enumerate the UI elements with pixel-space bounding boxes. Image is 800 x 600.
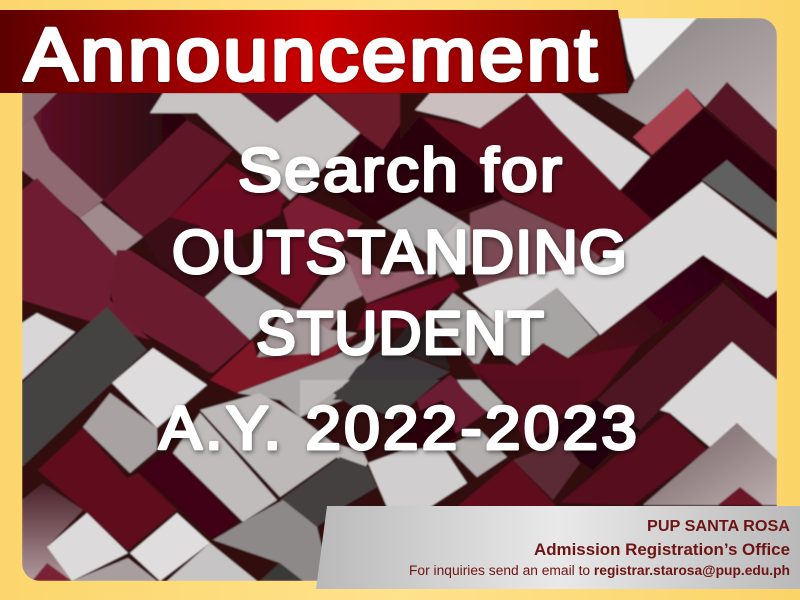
title text block: STUDENT: [256, 299, 545, 367]
title text block: [159, 136, 640, 462]
office name: PUP SANTA ROSA: [647, 518, 790, 535]
title text block: Search for: [238, 136, 564, 204]
announcement banner: [0, 10, 628, 96]
title text block: A.Y. 2022-2023: [159, 394, 640, 462]
office department: Admission Registration’s Office: [534, 541, 790, 559]
footer panel: office contact details: [316, 506, 800, 589]
title text block: OUTSTANDING: [172, 218, 628, 286]
inquiries line: For inquiries send an email to registrar.starosa@pup.edu.ph: [409, 563, 790, 578]
heading: Announcement: Announcement: [24, 13, 600, 96]
